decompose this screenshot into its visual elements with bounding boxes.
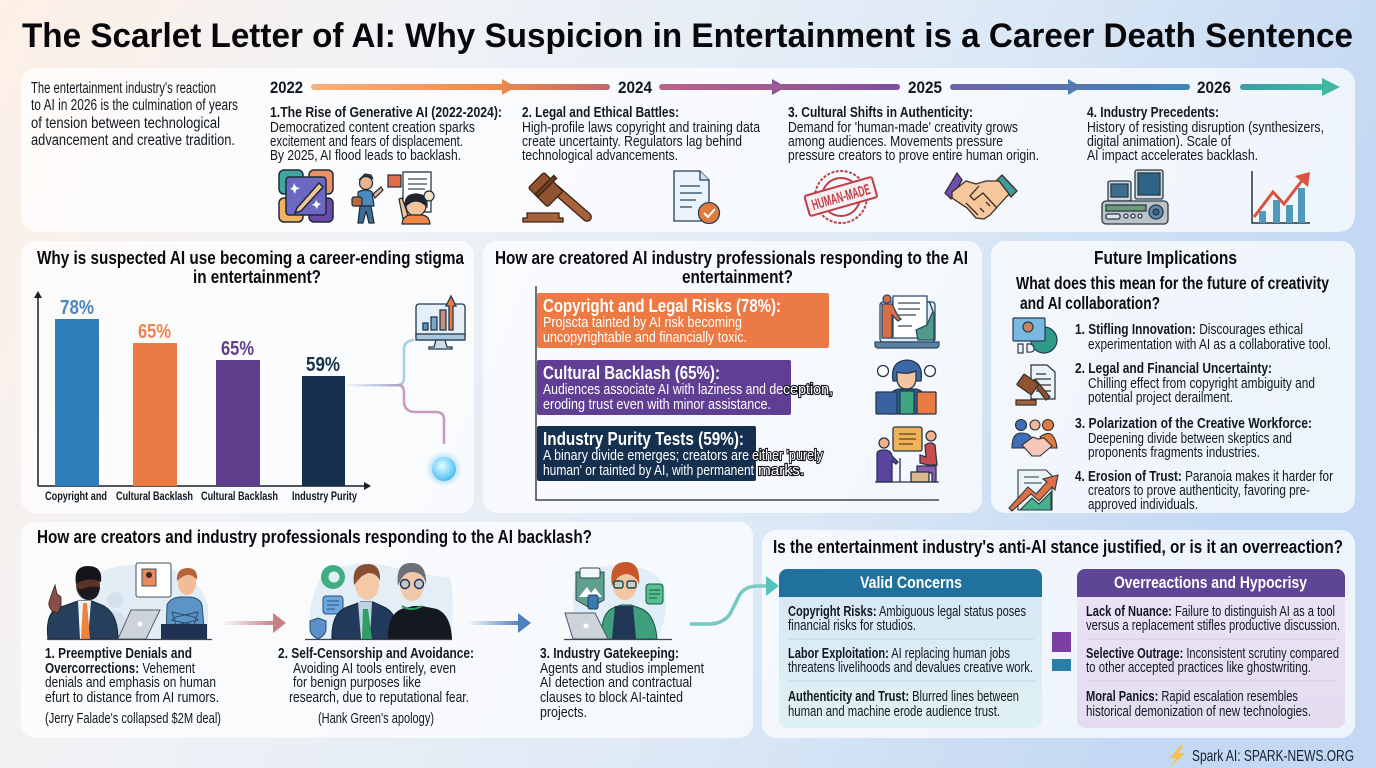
bar: copyright and legal risks: Projscta tainted by AI risk becoming [543,315,742,331]
card: overreactions and hypocrisy [1077,569,1345,728]
card: overreactions and hypocrisy: historical demonization of new technologies. [1086,704,1311,720]
text: preemptive denials: denials and emphasis on human [45,675,216,691]
heading [495,247,968,287]
text: rise of generative AI: Democratized content creation sparks [270,120,475,136]
bar: cultural backlash: eroding trust even with minor assistance. [543,397,771,413]
item: legal and financial uncertainty: Chilling effect from copyright ambiguity and [1088,376,1315,392]
bar: copyright and legal risks: Copyright and Legal Risks (78%): [543,295,781,316]
arrow: to step 2 [222,613,286,633]
text: industry precedents: 4. Industry Precedents: [1087,105,1219,121]
text: industry gatekeeping: AI detection and contractual [540,675,692,691]
text: industry precedents: digital animation). Scale of [1087,134,1232,150]
card: overreactions and hypocrisy: to other accepted practices like ghostwriting. [1086,660,1311,676]
heading: Why is suspected AI use becoming a career-ending stigma [37,247,465,268]
text: self-censorship: 2. Self-Censorship and Avoidance: [278,646,474,662]
panel: career-ending stigma chart [21,241,474,513]
bar: industry purity tests: A binary divide emerges; creators are [543,448,749,464]
card: overreactions and hypocrisy: Moral Panics: Rapid escalation resembles [1086,689,1298,705]
card: valid concerns [779,569,1042,728]
card: overreactions and hypocrisy: Overreactions and Hypocrisy [1114,573,1307,592]
bar chart: Cultural Backlash [201,491,278,503]
card: valid concerns: financial risks for studios. [788,618,916,634]
text: rise of generative AI: 1.The Rise of Generative AI (2022-2024): [270,105,502,121]
text: self-censorship [278,646,474,727]
item: legal and financial uncertainty: 2. Legal and Financial Uncertainty: [1075,361,1272,377]
bar: cultural backlash [537,360,833,415]
axes [536,286,939,500]
icon: vintage computer [1102,170,1168,224]
bar chart: Copyright and [45,491,107,503]
illustration: self-censorship scene [305,563,453,640]
heading: How are creators and industry professionals responding to the AI backlash? [37,526,592,547]
icon: glowing sphere [426,451,462,487]
text: cultural shifts [788,105,1039,164]
title: The Scarlet Letter of AI: Why Suspicion in Entertainment is a Career Death Sentence [22,17,1353,55]
item: legal and financial uncertainty [1075,361,1315,406]
bar chart: 59% [306,354,340,376]
text: self-censorship: research, due to reputational fear. [289,690,469,706]
icon: gavel [523,172,591,222]
icon: presentation and pie [1013,318,1057,353]
timeline arrow with years [270,78,1340,97]
timeline arrow with years: 2026 [1197,78,1231,97]
bar: industry purity tests: either 'purely [752,448,824,464]
bar: cultural backlash: Cultural Backlash (65%): [543,362,720,383]
panel: future implications [991,241,1355,513]
heading: How are creatored AI industry professionals responding to the AI [495,247,968,268]
card: valid concerns: Labor Exploitation: AI replacing human jobs [788,646,1010,662]
item: polarization [1075,416,1312,461]
intro text: to AI in 2026 is the culmination of years [31,97,238,114]
text: rise of generative AI: By 2025, AI flood leads to backlash. [270,148,461,164]
icon: document with check [674,171,720,224]
bar: copyright and legal risks [537,293,829,348]
icon: handshake [945,173,1017,219]
text: industry gatekeeping: Agents and studios implement [540,661,704,677]
icon: person with thought bubbles [876,360,936,414]
heading: in entertainment? [193,266,321,287]
item: erosion of trust: creators to prove authenticity, favoring pre- [1088,483,1310,499]
timeline arrow with years: 2022 [270,78,303,97]
card: valid concerns: human and machine erode audience trust. [788,704,1000,720]
text: self-censorship: Avoiding AI tools entirely, even [293,661,456,677]
text: cultural shifts: pressure creators to prove entire human origin. [788,148,1039,164]
bar chart [34,291,371,503]
subheading [1016,273,1329,313]
item: polarization: proponents fragments industries. [1088,445,1260,461]
bar chart: Cultural Backlash [116,491,193,503]
intro text: advancement and creative tradition. [31,132,235,149]
bar: industry purity tests [537,426,824,481]
icon: document with trend arrow [1009,470,1058,511]
icon: rising chart [1252,171,1310,223]
bar: industry purity tests: marks. [758,463,804,479]
item: polarization: Deepening divide between skeptics and [1088,431,1292,447]
text: self-censorship: for benign purposes like [293,675,421,691]
icon: displaced worker and protester [352,172,434,224]
panel: justified or overreaction [762,530,1355,738]
heading: entertainment? [682,266,793,287]
item: stifling innovation: 1. Stifling Innovation: Discourages ethical [1075,322,1303,338]
panel: timeline [21,68,1355,232]
heading [37,247,465,287]
text: rise of generative AI: excitement and fears of displacement. [270,134,463,150]
bar chart: 78% [60,297,94,319]
bar: cultural backlash: ception, [783,382,833,398]
panel: risks bars [483,241,982,513]
text: rise of generative AI [270,105,502,164]
icon: lightning bolt [1170,745,1185,767]
icon: human-made stamp: HUMAN-MADE [810,181,872,214]
card: valid concerns: threatens livelihoods and devalues creative work. [788,660,1033,676]
illustration: gatekeeping scene [564,562,672,640]
text: legal and ethical battles: technological advancements. [522,148,678,164]
card: valid concerns: Copyright Risks: Ambiguous legal status poses [788,604,1026,620]
heading: Future Implications [1094,247,1237,268]
text: industry gatekeeping: clauses to block AI-tainted [540,690,683,706]
illustration: denial scene [47,563,212,640]
arrow: to justified panel [690,576,779,624]
bar: cultural backlash: Audiences associate AI with laziness and de [543,382,783,398]
text: industry precedents [1087,105,1324,164]
icon: gavel and document [1016,365,1055,405]
panel: creator responses [21,522,753,738]
text: cultural shifts: Demand for 'human-made' creativity grows [788,120,1018,136]
text: preemptive denials: (Jerry Falade's collapsed $2M deal) [45,711,221,727]
text: industry precedents: History of resisting disruption (synthesizers, [1087,120,1324,136]
bar chart: 65% [221,338,254,360]
icon: AI palette [279,170,333,222]
text: preemptive denials: 1. Preemptive Denials and [45,646,192,662]
card: valid concerns: Authenticity and Trust: Blurred lines between [788,689,1019,705]
text: preemptive denials: efurt to distance from AI rumors. [45,690,219,706]
text: self-censorship: (Hank Green's apology) [318,711,434,727]
icon: group handshake [1012,420,1057,456]
timeline arrow with years: 2024 [618,78,652,97]
bar chart: 65% [138,321,171,343]
card: overreactions and hypocrisy: Lack of Nuance: Failure to distinguish AI as a tool [1086,604,1335,620]
text: legal and ethical battles: 2. Legal and Ethical Battles: [522,105,679,121]
text: preemptive denials: Overcorrections: Vehement [45,661,195,677]
text: cultural shifts: 3. Cultural Shifts in Authenticity: [788,105,973,121]
text: cultural shifts: among audiences. Movements pressure [788,134,1003,150]
item: stifling innovation [1075,322,1331,353]
text: industry gatekeeping: 3. Industry Gatekeeping: [540,646,679,662]
subheading: and AI collaboration? [1020,293,1160,313]
text: industry gatekeeping: projects. [540,705,587,721]
card: valid concerns: Valid Concerns [860,573,962,592]
bar: copyright and legal risks: uncopyrightable and financially toxic. [543,330,747,346]
icon: comparison squares [1052,632,1071,671]
bar: industry purity tests: human' or tainted by AI, with permanent [543,463,754,479]
arrow: to step 3 [467,613,531,633]
intro text [31,80,238,149]
connector lines [347,340,444,444]
item: erosion of trust: 4. Erosion of Trust: Paranoia makes it harder for [1075,469,1333,485]
item: erosion of trust [1075,469,1333,513]
item: legal and financial uncertainty: potential project derailment. [1088,390,1233,406]
item: erosion of trust: approved individuals. [1088,497,1198,513]
text: industry gatekeeping [540,646,704,721]
text: legal and ethical battles: High-profile laws copyright and training data [522,120,761,136]
intro text: The entertainment industry's reaction [31,80,216,97]
item: polarization: 3. Polarization of the Creative Workforce: [1075,416,1312,432]
timeline arrow with years: 2025 [908,78,942,97]
intro text: of tension between technological [31,115,220,132]
icon: monitor with rising chart [416,296,465,349]
text: preemptive denials [45,646,221,727]
text: legal and ethical battles [522,105,761,164]
icon: two people and discussion board [875,427,939,482]
icon: human-made stamp [804,171,877,223]
bar chart: Industry Purity [292,491,357,503]
icon: laptop with document exchange [875,295,939,348]
text: legal and ethical battles: create uncertainty. Regulators lag behind [522,134,742,150]
bar: industry purity tests: Industry Purity Tests (59%): [543,428,744,449]
text: industry precedents: AI impact accelerates backlash. [1087,148,1258,164]
